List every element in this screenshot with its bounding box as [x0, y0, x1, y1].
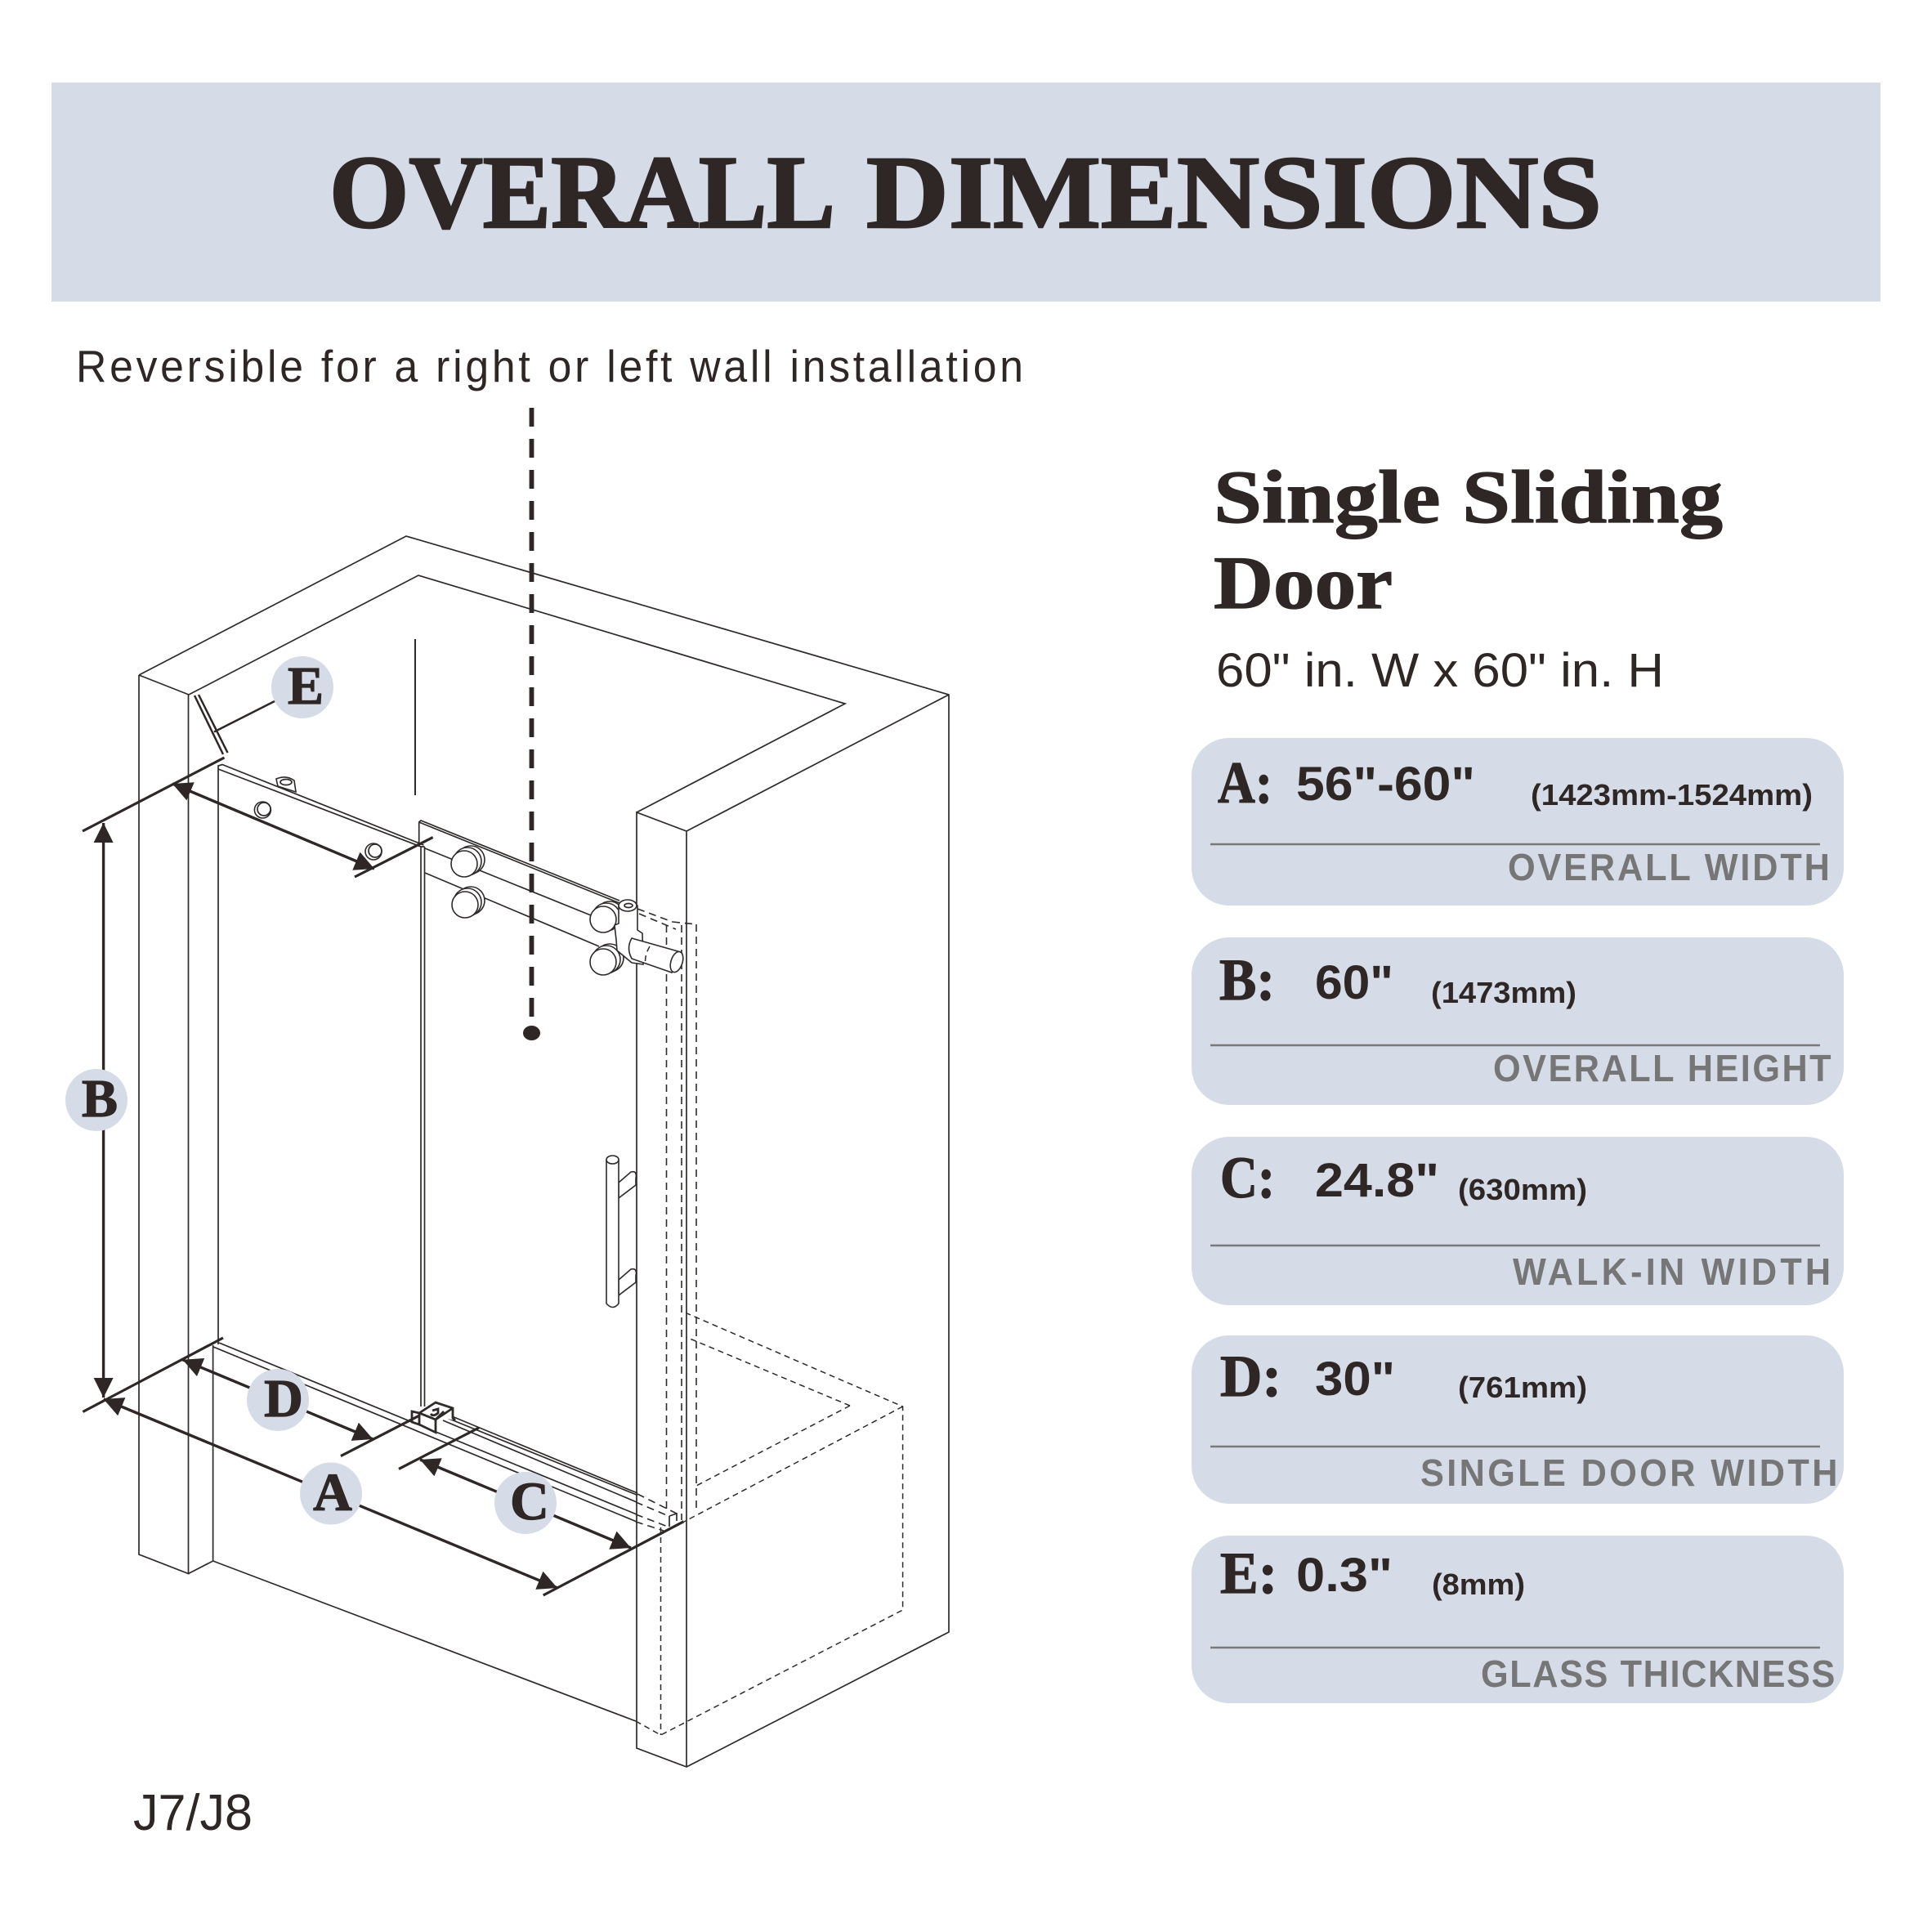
dimension E: E [288, 656, 324, 716]
card C walk-in width: WALK-IN WIDTH [1513, 1252, 1831, 1293]
wall and tub outlines [139, 536, 949, 1767]
upper width arrow [172, 784, 433, 877]
door rollers [451, 846, 624, 975]
card C walk-in width [1192, 1137, 1844, 1305]
header banner with title [51, 83, 1881, 302]
card A overall width: (1423mm-1524mm) [1531, 778, 1813, 812]
card A overall width [1192, 738, 1844, 906]
dimension A: A [313, 1463, 352, 1523]
top bracket and rail tube [615, 900, 686, 974]
card D single door width: (761mm) [1458, 1371, 1587, 1404]
card B overall height: 60" [1315, 956, 1393, 1009]
card B overall height: B: [1219, 947, 1275, 1013]
header banner with title: DIMENSIONS [866, 136, 1602, 250]
card B overall height [1192, 937, 1844, 1105]
dimension C: C [510, 1472, 549, 1532]
floor guide clip [412, 1402, 455, 1433]
card E glass thickness: 0.3" [1296, 1549, 1393, 1602]
card D single door width: SINGLE DOOR WIDTH [1420, 1453, 1837, 1494]
reversible dashed pointer [523, 408, 540, 1040]
card B overall height: (1473mm) [1431, 976, 1576, 1009]
front sliding panel [419, 821, 619, 1407]
dimension B [65, 758, 224, 1412]
reversible installation note: Reversible for a right or left wall installation [76, 342, 1023, 391]
card D single door width [1192, 1335, 1844, 1504]
rear fixed glass panel [218, 765, 423, 1344]
card E glass thickness [1192, 1536, 1844, 1703]
card C walk-in width: (630mm) [1458, 1173, 1587, 1206]
product title: Single Sliding [1214, 455, 1723, 539]
dimension A [104, 1399, 684, 1595]
size summary: 60" in. W x 60" in. H [1216, 644, 1664, 697]
dimension B: B [82, 1069, 118, 1129]
card E glass thickness: (8mm) [1432, 1568, 1525, 1601]
dimension E [195, 656, 333, 754]
bottom track [213, 1343, 677, 1531]
card B overall height: OVERALL HEIGHT [1493, 1049, 1831, 1089]
card A overall width: 56"-60" [1296, 758, 1475, 811]
card D single door width: 30" [1315, 1353, 1395, 1406]
door handle [606, 1156, 636, 1308]
dimension D [183, 1360, 420, 1456]
card D single door width: D: [1220, 1344, 1281, 1409]
product title [1214, 455, 1723, 624]
card E glass thickness: GLASS THICKNESS [1481, 1654, 1835, 1695]
dimension C [399, 1428, 631, 1548]
card A overall width: OVERALL WIDTH [1508, 847, 1830, 888]
product title: Door [1214, 541, 1393, 624]
card C walk-in width: C: [1220, 1145, 1275, 1210]
shower door line drawing [65, 408, 949, 1767]
short vertical back-wall line [414, 639, 416, 795]
card E glass thickness: E: [1220, 1541, 1277, 1606]
card A overall width: A: [1218, 750, 1272, 816]
dimension D: D [264, 1369, 303, 1429]
card C walk-in width: 24.8" [1315, 1154, 1439, 1207]
model code: J7/J8 [133, 1785, 253, 1841]
header banner with title: OVERALL [329, 136, 835, 250]
